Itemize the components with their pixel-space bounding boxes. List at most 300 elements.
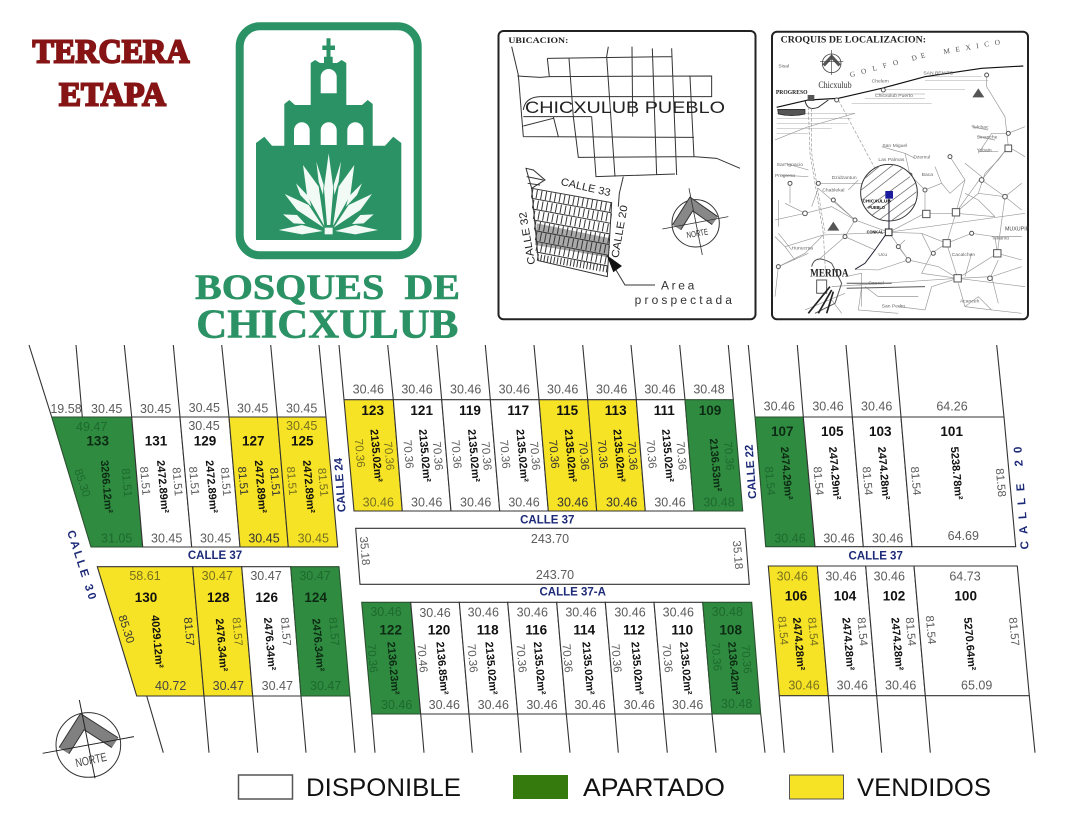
- lot 101: 81.58: [993, 468, 1007, 498]
- lot 100: 5270.64m²: [961, 617, 978, 671]
- lot 133: 3266.12m²: [98, 460, 114, 514]
- frontage dimensions: upper left block: 30.45: [286, 402, 317, 416]
- town labels: Sisal: [778, 64, 789, 70]
- label: chicxulub: Chicxulub: [818, 81, 852, 91]
- route to merida: [855, 199, 889, 269]
- lot 105: 30.46: [823, 531, 855, 545]
- lot 114: 30.46: [574, 698, 606, 712]
- lot 109: 70.36: [721, 441, 736, 471]
- lot 128: 30.47: [202, 569, 233, 583]
- legend: apartado: APARTADO: [583, 774, 725, 802]
- legend: disponible: DISPONIBLE: [306, 774, 461, 802]
- lot 114: 2135.02m²: [579, 641, 596, 696]
- lot 111: 111: [654, 403, 675, 418]
- lot 123: 123: [361, 403, 384, 418]
- lot 108: 70.36: [738, 644, 753, 674]
- lot 124: 30.47: [310, 679, 341, 693]
- frontage dimensions: upper middle block: 30.46: [353, 383, 384, 397]
- lot 122: 30.46: [370, 605, 402, 619]
- lot 125: 81.51: [315, 467, 330, 497]
- lot 105: 81.54: [810, 466, 825, 496]
- lot 119: 70.36: [448, 439, 463, 469]
- lot 129: 129: [194, 434, 216, 448]
- lot 128: [193, 567, 253, 696]
- lot 107: 2474.29m²: [778, 446, 794, 501]
- frontage dimensions: upper middle block: 30.46: [401, 383, 433, 397]
- lot 124: 2476.34m²: [309, 618, 326, 672]
- frontage dimensions: upper right block: 30.46: [812, 400, 844, 414]
- lot 101: 81.54: [908, 466, 922, 496]
- lot 128: 128: [207, 590, 230, 605]
- lot 128: 81.57: [229, 617, 244, 647]
- street labels: CALLE 30: [64, 529, 98, 601]
- title: tercera etapa: ETAPA: [59, 76, 166, 114]
- town labels: Caucel: [868, 280, 884, 286]
- lot 100: 81.57: [1006, 617, 1021, 647]
- lot 115: 70.36: [546, 439, 561, 469]
- lot 105: [803, 417, 863, 547]
- locator circle with hatching: CHICXULUB: [862, 199, 891, 205]
- lot 129: 81.51: [218, 467, 232, 497]
- marker: conkal: CONKAL: [867, 229, 883, 235]
- town markers: [776, 73, 1012, 282]
- lot 133: 81.51: [119, 468, 133, 498]
- town labels: Hunucma: [792, 245, 813, 251]
- lot 106: 30.46: [788, 679, 820, 693]
- lot 100: 65.09: [961, 679, 992, 693]
- lot 127: 81.51: [235, 466, 250, 496]
- icon: small compass: [820, 50, 843, 75]
- lot 112: [605, 602, 664, 714]
- lot 131: [132, 417, 192, 547]
- lot 130: 4029.12m²: [148, 615, 165, 669]
- lot 110: 30.46: [663, 606, 694, 620]
- lot 124: 124: [304, 590, 327, 605]
- lot 130: 85.30: [116, 614, 136, 645]
- icon: north compass: NORTE: [686, 226, 709, 240]
- lot 124: 30.47: [299, 569, 331, 583]
- lot 102: 30.46: [885, 679, 916, 693]
- lot 119: 2135.02m²: [465, 429, 482, 483]
- lot 100: 64.73: [949, 570, 981, 584]
- lot 129: 30.45: [188, 419, 220, 433]
- lot 129: 30.45: [200, 531, 231, 545]
- coast hatching: [777, 77, 988, 133]
- lot 126: 126: [255, 590, 278, 605]
- frontage dimensions: upper left block: 30.45: [189, 401, 220, 415]
- lot 107: 30.46: [774, 531, 806, 545]
- label: area prospectada: [635, 279, 732, 307]
- icon: north compass: [43, 700, 134, 778]
- street boundary lines: upper: [29, 345, 1004, 417]
- lot 108: 30.48: [721, 697, 752, 711]
- frontage dimensions: upper middle block: 30.46: [450, 383, 481, 397]
- label: golfo de mexico: [849, 37, 1001, 79]
- town labels: Telchac: [972, 124, 989, 130]
- lot 112: 112: [623, 622, 645, 638]
- label: croquis heading: CROQUIS DE LOCALIZACION:: [781, 34, 926, 45]
- lot 120: 120: [428, 622, 450, 638]
- lot 115: 115: [556, 403, 579, 418]
- lot 113: 113: [605, 403, 627, 418]
- lot 119: 70.36: [478, 441, 493, 471]
- town labels: Chicxulub Puerto: [875, 93, 913, 99]
- icon: north compass: [662, 188, 728, 255]
- frontage dimensions: upper middle block: 30.46: [596, 383, 627, 397]
- lot 102: [866, 566, 925, 696]
- lot 117: [490, 400, 548, 511]
- lot 109: 2136.53m²: [707, 438, 723, 492]
- lot 128: 30.47: [213, 679, 244, 693]
- lot 104: 30.46: [837, 679, 868, 693]
- lot 102: 81.54: [903, 617, 917, 647]
- central block 243.70: [356, 528, 749, 584]
- lot 122: 70.36: [364, 643, 379, 673]
- frontage dimensions: upper left block: 30.45: [91, 402, 122, 416]
- lot 113: 70.36: [624, 441, 639, 471]
- lot 130: 58.61: [129, 569, 161, 583]
- lot 108: 70.36: [708, 642, 723, 672]
- lot 101: 64.69: [948, 529, 979, 543]
- street labels: [517, 176, 631, 266]
- lot 115: 2135.02m²: [562, 429, 578, 483]
- frontage dimensions: upper middle block: 30.46: [644, 383, 676, 397]
- lot 103: 2474.28m²: [875, 446, 892, 501]
- panel: croquis de localizacion map: [772, 32, 1030, 319]
- lot 103: 30.46: [872, 531, 903, 545]
- lot 120: 70.46: [414, 643, 429, 673]
- locator circle with hatching: PUEBLO: [868, 205, 885, 210]
- frontage dimensions: upper middle block: 30.48: [693, 383, 725, 397]
- lot 119: [442, 400, 500, 511]
- lot 130: 81.57: [181, 617, 196, 647]
- lot 106: [768, 566, 828, 696]
- icon: north compass: NORTE: [74, 750, 108, 770]
- brand name: BOSQUES DE: [195, 267, 460, 307]
- street labels: CALLE 20: [1012, 446, 1032, 550]
- street boundary lines: lower: [147, 696, 1035, 753]
- lot 133: 85.30: [72, 467, 92, 499]
- title: tercera etapa: [32, 34, 190, 114]
- lot 118: 30.46: [468, 606, 499, 620]
- lot 133: [52, 417, 143, 547]
- lot 116: 30.46: [526, 698, 558, 712]
- frontage dimensions: upper right block: [764, 400, 968, 414]
- coastline and highway: [777, 66, 1023, 116]
- title: tercera etapa: TERCERA: [32, 34, 190, 70]
- urban area of merida: [808, 259, 925, 313]
- lot 112: 2135.02m²: [628, 641, 645, 696]
- road network: [775, 73, 1025, 313]
- lot 133: 49.47: [76, 420, 107, 434]
- label: area prospectada: prospectada: [635, 293, 732, 307]
- town labels: Cacalchen: [952, 252, 975, 258]
- lot 120: 30.46: [429, 698, 460, 712]
- lot 119: 119: [459, 403, 481, 418]
- town labels: Dzemul: [913, 155, 930, 161]
- town labels: Las Palmas: [878, 157, 905, 163]
- town labels: Progreso: [775, 173, 795, 179]
- lot 108: [703, 602, 761, 714]
- lot 121: [393, 400, 451, 511]
- legend: vendidos: VENDIDOS: [857, 774, 991, 802]
- lot 122: 122: [379, 622, 402, 638]
- town labels: Tekanto: [992, 235, 1009, 241]
- town labels: MUXUPIP: [1005, 226, 1030, 232]
- lot 122: 30.46: [381, 698, 412, 712]
- icon: ruins triangles: [827, 88, 984, 231]
- lot 116: 116: [525, 622, 548, 638]
- lot 107: 81.54: [762, 466, 777, 496]
- town labels: San Pedro: [882, 304, 905, 310]
- lot 113: [588, 400, 645, 511]
- lot 106: 30.46: [777, 570, 808, 584]
- brand name: CHICXULUB: [196, 300, 458, 346]
- central block 243.70: 243.70: [531, 532, 569, 546]
- panel: ubicacion map: [498, 31, 756, 319]
- lot 104: [817, 566, 877, 696]
- lot 118: [459, 602, 518, 714]
- lot 121: 30.46: [411, 496, 442, 510]
- legend: disponible: [238, 774, 461, 802]
- town labels: Dzidzantun: [832, 175, 857, 181]
- lot 116: [508, 602, 566, 714]
- town labels: San Miguel: [882, 143, 907, 149]
- lot 102: 2474.28m²: [888, 617, 905, 671]
- lot 129: 81.51: [186, 466, 201, 496]
- lot 127: 30.45: [248, 531, 280, 545]
- street labels: CALLE 22: [744, 444, 759, 499]
- legend: apartado: [513, 774, 725, 802]
- lot 108: 2136.42m²: [725, 641, 742, 696]
- lot 101: 101: [940, 424, 963, 439]
- lot 111: 2135.02m²: [659, 429, 676, 483]
- lot 131: 131: [145, 434, 168, 448]
- frontage dimensions: upper middle block: [353, 383, 725, 397]
- lot 106: 81.54: [805, 617, 820, 647]
- label: golfo de mexico: DE: [910, 50, 927, 63]
- lot 114: 114: [573, 622, 596, 638]
- lot 125: 81.51: [284, 466, 298, 496]
- lot 112: 70.36: [608, 643, 623, 673]
- lot 131: 81.51: [137, 466, 152, 496]
- lot 126: 2476.34m²: [261, 617, 278, 671]
- town labels: Sinanche: [977, 134, 998, 140]
- lot 116: 70.36: [513, 643, 528, 673]
- lot 119: 30.46: [460, 496, 491, 510]
- lot 116: 2135.02m²: [531, 641, 547, 696]
- lot 105: 2474.29m²: [826, 446, 843, 501]
- lot 131: 30.45: [151, 531, 182, 545]
- lot 127: [229, 417, 288, 547]
- lot 126: 30.47: [262, 679, 293, 693]
- lot 125: [277, 417, 338, 547]
- lot 127: 127: [242, 434, 265, 448]
- lot 127: 2472.89m²: [252, 460, 268, 514]
- lot 104: 81.54: [854, 617, 869, 647]
- label: area prospectada: Area: [661, 279, 695, 293]
- legend: [238, 774, 991, 802]
- lot 117: 70.36: [497, 439, 512, 469]
- frontage dimensions: upper left block: [50, 401, 317, 416]
- lot 123: [344, 400, 402, 511]
- lot 117: 70.36: [527, 441, 542, 471]
- lot 114: 70.36: [559, 643, 574, 673]
- lot 112: 30.46: [624, 698, 655, 712]
- lot 103: 81.54: [859, 466, 874, 496]
- lot 115: [539, 400, 597, 511]
- street labels: CALLE 32: [517, 211, 538, 266]
- lot 109: [685, 400, 743, 511]
- lot 107: [755, 417, 815, 547]
- lot 125: 30.45: [298, 531, 329, 545]
- lot 113: 2135.02m²: [610, 429, 627, 483]
- lot 108: 108: [719, 622, 742, 638]
- lot 115: 70.36: [576, 441, 591, 471]
- lot 111: 70.36: [673, 441, 688, 471]
- lot 125: 125: [291, 434, 314, 448]
- frontage dimensions: upper left block: 30.45: [140, 402, 171, 416]
- lot 110: [654, 602, 712, 714]
- lot 120: 2136.85m²: [433, 641, 450, 696]
- lot 121: 2135.02m²: [416, 429, 433, 483]
- frontage dimensions: upper right block: 30.46: [764, 400, 795, 414]
- locator circle with hatching: [861, 164, 917, 221]
- lot 129: 2472.89m²: [203, 460, 219, 514]
- lot 101: [901, 417, 1016, 547]
- lot 118: 118: [477, 622, 499, 638]
- town labels: San Ignacio: [777, 162, 803, 168]
- label: golfo de mexico: GOLFO: [849, 58, 899, 79]
- lot 125: 2472.89m²: [300, 460, 317, 514]
- lot 116: 30.46: [517, 606, 548, 620]
- lot 107: 107: [771, 424, 794, 439]
- lot 121: 70.36: [430, 441, 444, 471]
- street labels: CALLE 37-A: [539, 586, 606, 598]
- town labels: Acanceh: [960, 299, 980, 305]
- lot 122: [362, 602, 421, 714]
- street labels: [64, 444, 1032, 601]
- lot 120: [411, 602, 469, 714]
- lot 133: 31.05: [101, 531, 132, 545]
- town labels: Chelem: [872, 79, 889, 85]
- street labels: CALLE 37: [849, 551, 903, 563]
- lot 121: 121: [410, 403, 433, 418]
- town labels: Baca: [922, 172, 933, 178]
- lot 117: 117: [507, 403, 529, 418]
- lot 129: [180, 417, 240, 547]
- lot 104: 104: [834, 588, 857, 604]
- lot 128: 2476.34m²: [213, 618, 229, 672]
- lot 110: 110: [671, 622, 693, 638]
- lot 117: 2135.02m²: [513, 429, 530, 483]
- lot 124: 81.57: [326, 617, 341, 647]
- lot 126: [242, 567, 301, 696]
- lot 118: 70.36: [464, 643, 479, 673]
- lot 105: 105: [821, 424, 844, 439]
- lot 115: 30.46: [557, 496, 588, 510]
- label: town name: CHICXULUB PUEBLO: [525, 98, 725, 117]
- lot 109: 109: [699, 403, 721, 418]
- street labels: CALLE 37: [188, 550, 242, 562]
- lot 131: 2472.89m²: [154, 460, 171, 514]
- town labels: SAN BENITO: [923, 70, 954, 76]
- lot 103: [852, 417, 912, 547]
- lot 127: 81.51: [267, 467, 282, 497]
- logo: church and agave: [240, 26, 418, 255]
- street labels: CALLE 33: [560, 176, 612, 199]
- street labels: CALLE 37: [520, 514, 574, 526]
- lot 131: 81.51: [169, 467, 184, 497]
- frontage dimensions: upper right block: 30.46: [861, 400, 892, 414]
- lot 122: 2136.23m²: [384, 641, 401, 696]
- label: ubicacion: UBICACION:: [508, 36, 568, 45]
- lot 100: 81.54: [923, 615, 937, 645]
- lot 117: 30.46: [508, 496, 540, 510]
- frontage dimensions: upper left block: 19.58: [50, 402, 82, 416]
- lot 126: 30.47: [250, 569, 282, 583]
- frontage dimensions: upper left block: 30.45: [237, 402, 268, 416]
- street labels: CALLE 24: [333, 457, 349, 513]
- town labels: [775, 64, 1030, 310]
- lot 130: 40.72: [155, 679, 186, 693]
- label: golfo de mexico: MEXICO: [943, 37, 1001, 56]
- lot 111: 70.36: [643, 439, 658, 469]
- prospected lots grid: [526, 168, 612, 277]
- lot 104: 30.46: [825, 570, 857, 584]
- frontage dimensions: upper right block: 64.26: [936, 400, 968, 414]
- lot 126: 81.57: [278, 617, 292, 647]
- lot 120: 30.46: [419, 606, 451, 620]
- central block 243.70: 35.18: [357, 536, 371, 566]
- street labels: CALLE 20: [609, 204, 631, 259]
- legend: vendidos: [790, 774, 991, 802]
- lot 118: 30.46: [478, 698, 509, 712]
- arrow to prospected area: [607, 255, 655, 285]
- label: merida: MERIDA: [810, 266, 849, 280]
- town labels: Ucu: [878, 252, 887, 258]
- lot 121: 70.36: [400, 439, 415, 469]
- lot 110: 30.46: [672, 698, 703, 712]
- label: progreso: PROGRESO: [776, 89, 807, 96]
- lot 106: 2474.28m²: [790, 617, 807, 671]
- lot 112: 30.46: [614, 606, 646, 620]
- town labels: Chablekal: [822, 188, 844, 194]
- lot 118: 2135.02m²: [482, 641, 499, 696]
- lot 106: 81.54: [775, 616, 790, 646]
- lot 101: 5238.78m²: [948, 446, 964, 501]
- lot 111: [636, 400, 694, 511]
- lot 113: 30.46: [606, 496, 637, 510]
- lot 100: [914, 566, 1029, 696]
- lot 114: 30.46: [565, 606, 597, 620]
- lot 114: [557, 602, 615, 714]
- town labels: Yobain: [977, 148, 992, 154]
- lot 102: 30.46: [874, 570, 905, 584]
- central block 243.70: 243.70: [536, 568, 574, 582]
- lot 130: 130: [135, 590, 157, 605]
- frontage dimensions: upper middle block: 30.46: [499, 383, 530, 397]
- lot 125: 30.45: [286, 419, 317, 433]
- frontage dimensions: upper middle block: 30.46: [547, 383, 578, 397]
- brand name: [195, 267, 460, 346]
- central block 243.70: 35.18: [730, 540, 744, 570]
- lot 106: 106: [785, 588, 808, 604]
- lot 110: 70.36: [659, 643, 674, 673]
- lot 109: 30.48: [703, 496, 735, 510]
- lot 110: 2135.02m²: [677, 641, 694, 696]
- lot 133: 133: [86, 434, 109, 448]
